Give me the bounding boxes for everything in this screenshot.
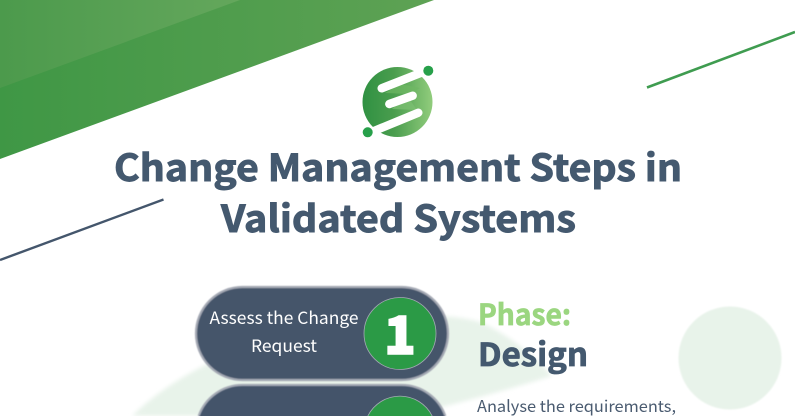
phase name: Design: [478, 330, 588, 376]
left accent line: [0, 200, 164, 260]
step 1 number badge: [364, 294, 436, 370]
step 1 label: Assess the Change: [210, 304, 358, 329]
step 1 pill: [196, 287, 448, 380]
step 1 label: [210, 304, 358, 357]
step 2 number badge: [368, 396, 432, 416]
step 1 label: Request: [251, 332, 318, 357]
background swoosh: [132, 316, 552, 416]
step 2 pill: [199, 385, 445, 416]
title: Validated Systems: [220, 189, 576, 243]
title: [114, 138, 682, 243]
background soft circle: [678, 306, 782, 410]
step 1 number badge: 1: [384, 294, 416, 369]
phase label: Phase:: [478, 292, 571, 334]
top-right accent line: [647, 32, 795, 88]
icon: logo: [362, 66, 433, 137]
title: Change Management Steps in: [114, 138, 682, 192]
top-left green banner: [0, 0, 434, 159]
